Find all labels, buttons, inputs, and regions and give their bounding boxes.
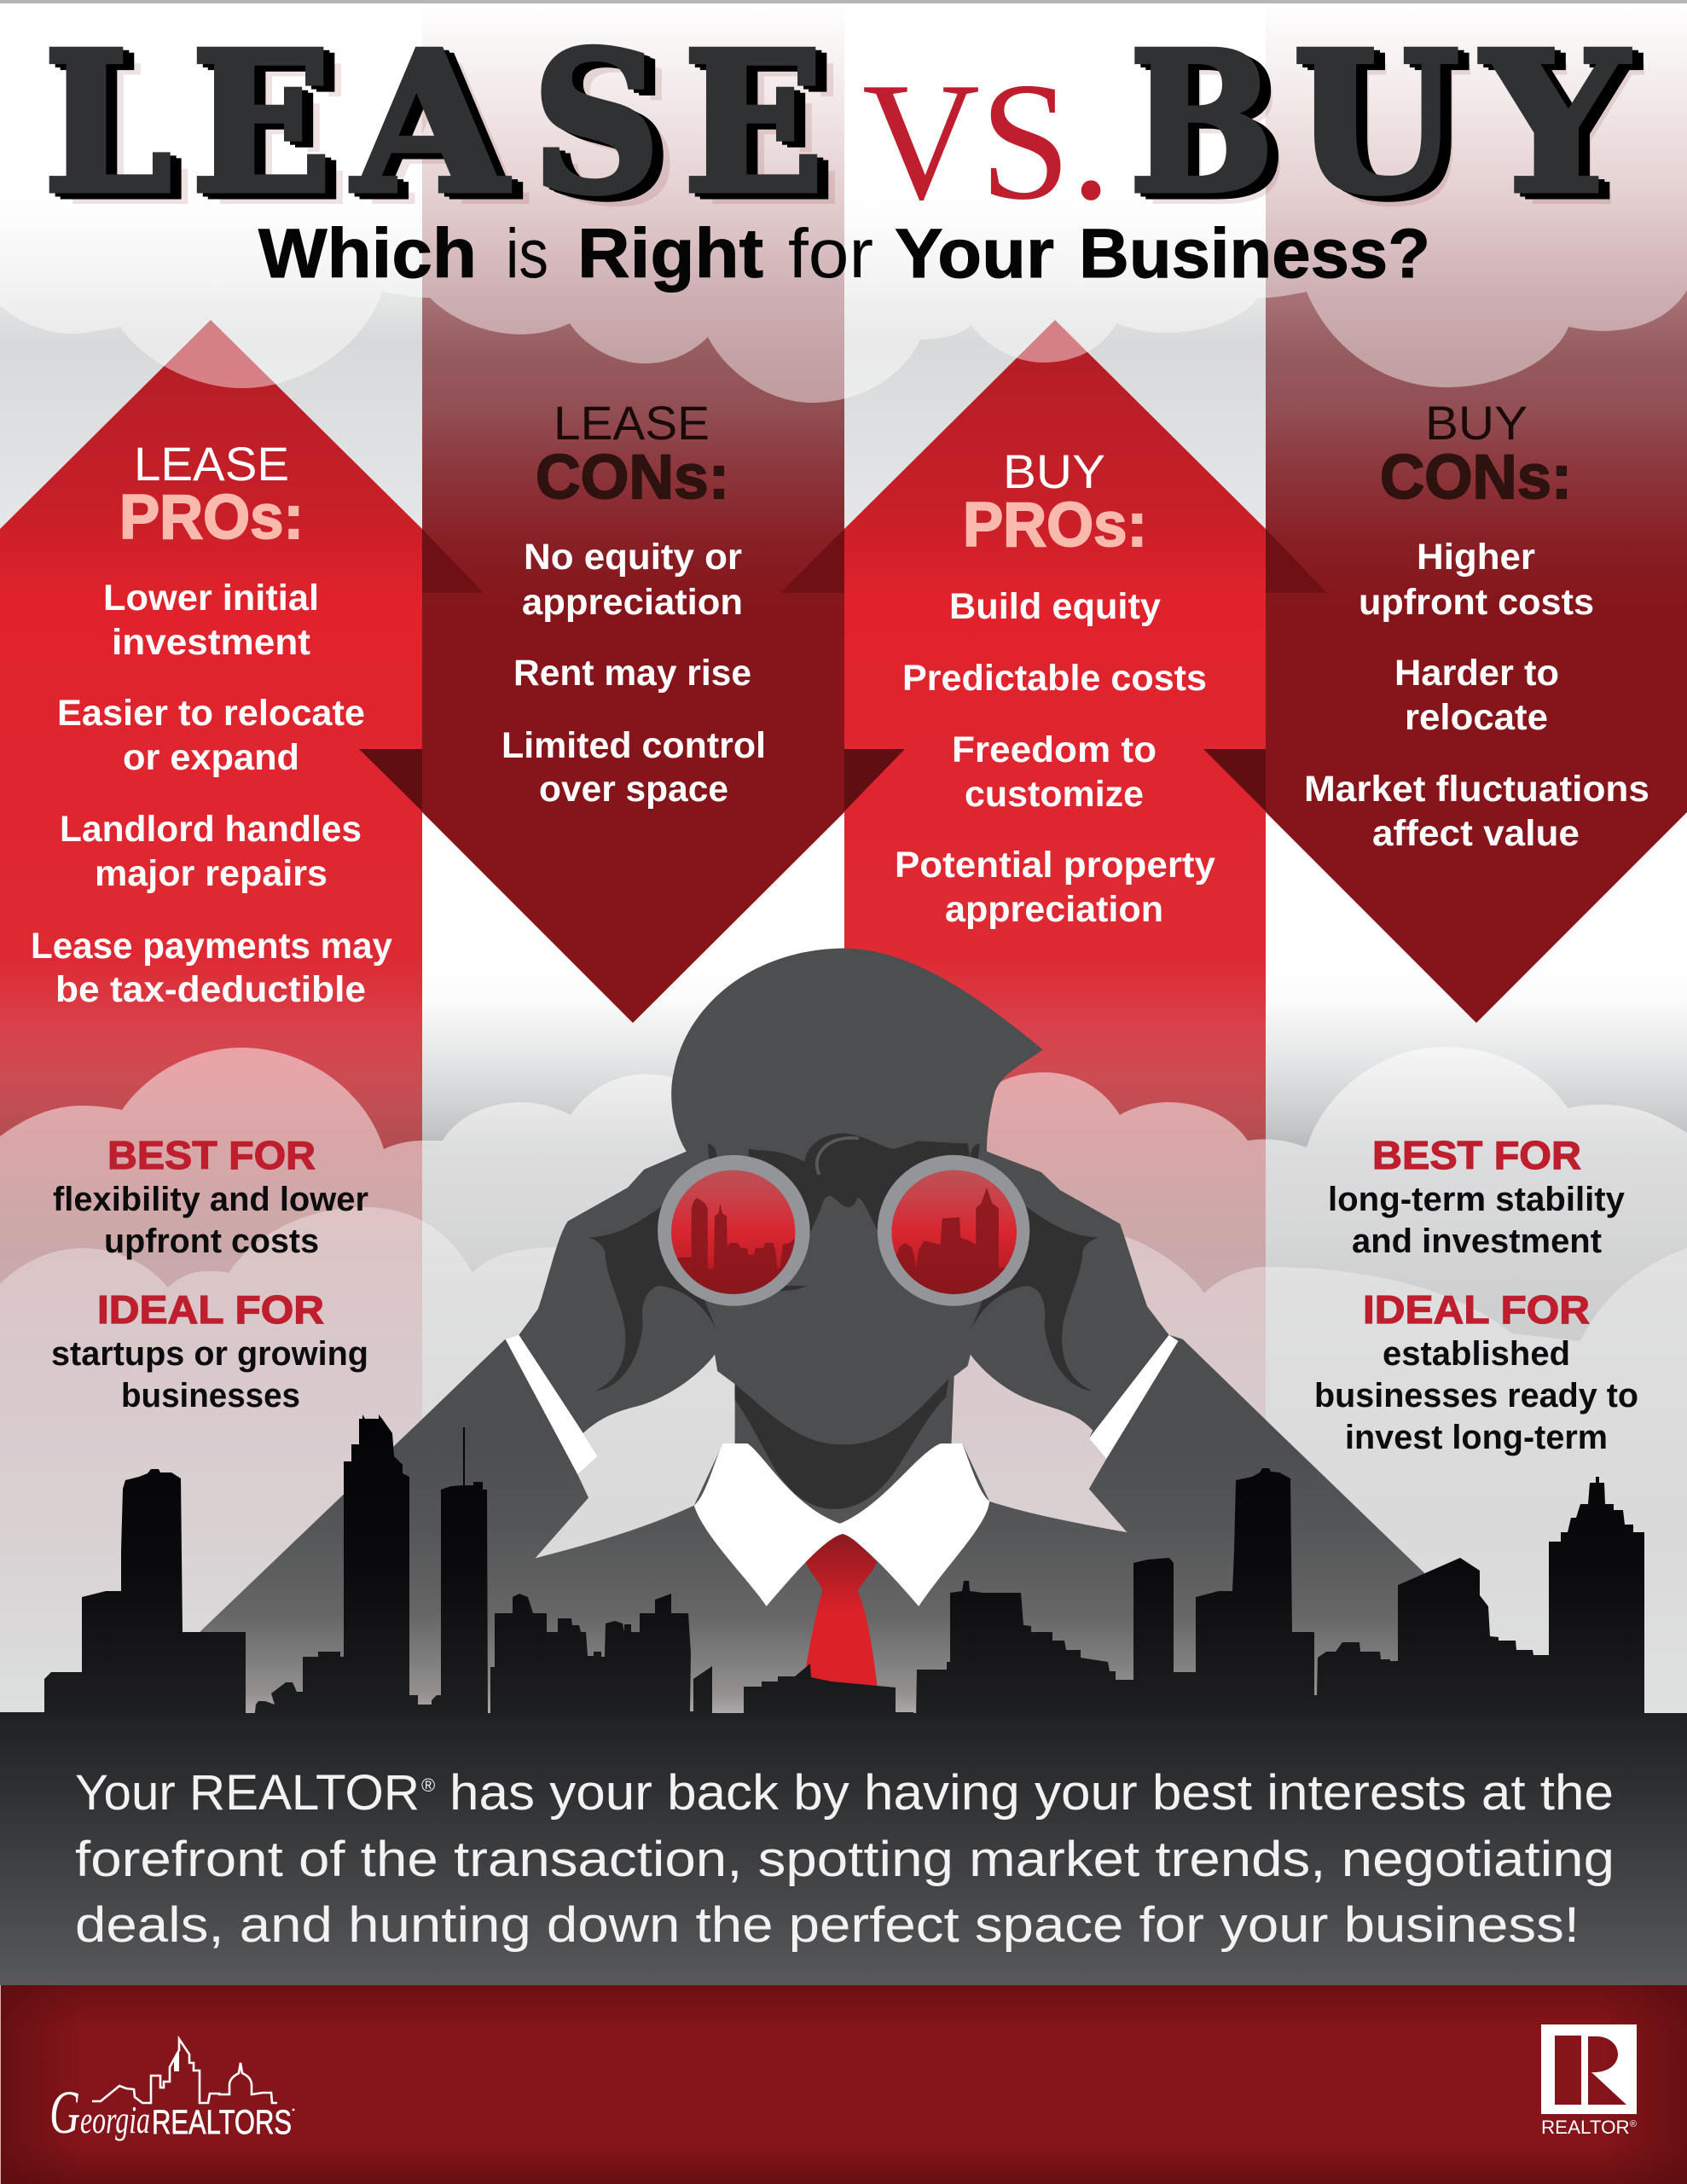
panel: lease pros column background bbox=[0, 0, 422, 1715]
heading: buy pros: PROs: bbox=[963, 491, 1147, 560]
title word: LEASE: E bbox=[191, 10, 332, 236]
title word: LEASE: E bbox=[694, 16, 835, 242]
illustration: businessman with binoculars bbox=[200, 949, 1466, 1722]
text block: buy best for / ideal for: businesses ready to bbox=[1314, 1377, 1638, 1414]
text block: buy pros list: customize bbox=[965, 774, 1144, 815]
title word: LEASE: E bbox=[704, 24, 844, 250]
text block: closing message: forefront of the transaction, spotting market trends, negotiating bbox=[75, 1832, 1615, 1887]
heading: buy pros: BUY bbox=[1003, 444, 1105, 498]
title word: LEASE: E bbox=[689, 14, 830, 240]
panel: lease cons column background bbox=[422, 0, 844, 1715]
text block: buy pros list: Potential property bbox=[895, 845, 1215, 886]
top clouds bbox=[0, 0, 1687, 403]
title word: LEASE: S bbox=[553, 24, 681, 250]
top edge strip bbox=[0, 0, 1687, 3]
red tie bbox=[806, 1534, 878, 1692]
title word: LEASE bbox=[43, 10, 844, 250]
suit, arms and head silhouette bbox=[200, 949, 1466, 1722]
text block: buy cons list bbox=[1304, 537, 1649, 854]
title word: BUY: Y bbox=[1496, 24, 1645, 250]
title word: LEASE: L bbox=[64, 24, 192, 250]
lower clouds, front layer bbox=[0, 1207, 1687, 1715]
logo: Georgia Realtors: Georgia bbox=[49, 2078, 150, 2146]
text block: buy cons list: Market fluctuations bbox=[1304, 769, 1649, 810]
title word: LEASE: E bbox=[683, 10, 824, 236]
text block: lease cons list: No equity or bbox=[524, 537, 742, 578]
text block: lease pros list: Lease payments may bbox=[31, 926, 392, 967]
face shadows and fingers bbox=[588, 1133, 1099, 1509]
title word: BUY: U bbox=[1299, 14, 1465, 240]
text block: buy best for / ideal for bbox=[1314, 1133, 1638, 1456]
text block: lease best for / ideal for: flexibility and lower bbox=[53, 1181, 368, 1218]
panel: closing message bbox=[0, 1713, 1687, 1985]
title word: LEASE: L bbox=[49, 14, 177, 240]
text block: buy pros list: Freedom to bbox=[952, 729, 1157, 770]
text block: lease pros list: Landlord handles bbox=[60, 809, 362, 850]
subtitle: Which bbox=[258, 215, 477, 293]
text block: closing message: ® bbox=[421, 1774, 435, 1796]
text block: lease pros list: investment bbox=[112, 622, 310, 663]
subtitle bbox=[258, 215, 1430, 293]
text block: buy best for / ideal for: long-term stability bbox=[1328, 1181, 1626, 1218]
text block: lease best for / ideal for bbox=[51, 1133, 368, 1414]
title word: LEASE: A bbox=[351, 10, 509, 236]
text block: lease cons list bbox=[501, 537, 766, 810]
logo: REALTOR block R bbox=[1541, 2024, 1637, 2138]
subtitle: Your bbox=[895, 215, 1054, 293]
logo: Georgia Realtors: REALTORS bbox=[152, 2104, 292, 2141]
right binocular lens bbox=[878, 1155, 1029, 1306]
text block: lease cons list: over space bbox=[539, 769, 728, 810]
title word: BUY: Y bbox=[1481, 10, 1630, 236]
title word: LEASE: S bbox=[532, 10, 660, 236]
subtitle: Business? bbox=[1079, 215, 1430, 293]
heading: lease pros: PROs: bbox=[119, 483, 304, 552]
logo: Georgia Realtors bbox=[49, 2039, 294, 2146]
white shirt collar bbox=[694, 1443, 989, 1606]
title word: LEASE: E bbox=[212, 24, 352, 250]
text block: lease pros list bbox=[31, 578, 392, 1010]
text block: buy cons list: Higher bbox=[1417, 537, 1535, 578]
text block: buy best for / ideal for: IDEAL FOR bbox=[1363, 1287, 1590, 1332]
text block: lease pros list: be tax-deductible bbox=[55, 969, 366, 1010]
text block: lease pros list: Easier to relocate bbox=[57, 693, 365, 734]
text block: lease best for / ideal for: upfront costs bbox=[104, 1223, 319, 1260]
text block: lease pros list: Lower initial bbox=[103, 578, 319, 619]
text block: buy best for / ideal for: BEST FOR bbox=[1372, 1133, 1581, 1177]
title word: BUY: U bbox=[1304, 16, 1470, 242]
title word: LEASE: L bbox=[55, 16, 183, 242]
title word: BUY: Y bbox=[1492, 16, 1641, 242]
title word: LEASE: S bbox=[543, 16, 671, 242]
title word: LEASE: E bbox=[202, 16, 343, 242]
text block: closing message: Your REALTOR bbox=[75, 1765, 420, 1821]
heading: lease pros: LEASE bbox=[134, 437, 289, 491]
heading: buy cons: BUY bbox=[1425, 396, 1528, 450]
left binocular lens bbox=[658, 1155, 810, 1306]
text block: buy pros list: Predictable costs bbox=[902, 658, 1207, 699]
text block: lease best for / ideal for: startups or growing bbox=[51, 1335, 368, 1373]
text block: lease best for / ideal for: BEST FOR bbox=[107, 1133, 316, 1177]
text block: buy cons list: upfront costs bbox=[1359, 582, 1594, 623]
subtitle: for bbox=[788, 215, 873, 293]
text block: lease cons list: appreciation bbox=[522, 582, 743, 623]
title word: BUY: Y bbox=[1487, 14, 1636, 240]
arrow fold shadows bbox=[359, 529, 1327, 811]
text block: closing message: has your back by having your best interests at the bbox=[449, 1765, 1614, 1821]
text block: buy pros list: Build equity bbox=[949, 586, 1161, 627]
text block: closing message bbox=[75, 1765, 1615, 1953]
title word: BUY: B bbox=[1129, 10, 1274, 236]
title word: LEASE: A bbox=[372, 24, 530, 250]
text block: lease cons list: Limited control bbox=[501, 725, 766, 766]
title word: LEASE: A bbox=[362, 16, 520, 242]
title word: LEASE: A bbox=[357, 14, 515, 240]
logo: REALTOR block R: ® bbox=[1630, 2119, 1637, 2129]
text block: closing message: deals, and hunting down the perfect space for your business! bbox=[75, 1897, 1580, 1953]
lower clouds, back layer bbox=[0, 1047, 1687, 1715]
title word: LEASE: E bbox=[197, 14, 338, 240]
text block: buy best for / ideal for: and investment bbox=[1352, 1223, 1602, 1260]
text block: buy best for / ideal for: invest long-term bbox=[1345, 1419, 1608, 1456]
text block: lease pros list: major repairs bbox=[95, 853, 328, 894]
title word: BUY bbox=[1129, 10, 1645, 250]
panel: footer band bbox=[0, 1985, 1687, 2184]
logo: REALTOR block R: REALTOR bbox=[1541, 2117, 1628, 2138]
text block: lease best for / ideal for: businesses bbox=[121, 1377, 300, 1414]
text block: buy pros list bbox=[895, 586, 1215, 930]
title word: BUY: U bbox=[1293, 10, 1459, 236]
heading: lease pros bbox=[119, 437, 304, 552]
heading: lease cons: LEASE bbox=[554, 396, 710, 450]
subtitle: is bbox=[506, 215, 548, 293]
city skyline bbox=[0, 1414, 1687, 1732]
panel: buy pros column background bbox=[844, 0, 1266, 1715]
heading: lease cons: CONs: bbox=[536, 443, 729, 512]
text block: buy cons list: relocate bbox=[1405, 697, 1548, 738]
text block: buy pros list: appreciation bbox=[945, 889, 1163, 930]
panel: buy cons column background bbox=[1266, 0, 1687, 1715]
text block: lease pros list: or expand bbox=[123, 737, 299, 778]
title word: BUY: B bbox=[1145, 24, 1290, 250]
text block: buy cons list: Harder to bbox=[1394, 653, 1559, 694]
title word: VS.: VS. bbox=[862, 48, 1111, 235]
text block: buy cons list: affect value bbox=[1372, 813, 1580, 854]
text block: lease best for / ideal for: IDEAL FOR bbox=[97, 1287, 324, 1332]
left shirt cuff bbox=[505, 1335, 598, 1474]
title word: LEASE: L bbox=[43, 10, 171, 236]
title word: LEASE: S bbox=[538, 14, 666, 240]
heading: buy cons bbox=[1380, 396, 1572, 512]
text block: lease cons list: Rent may rise bbox=[513, 653, 751, 694]
title word: BUY: B bbox=[1135, 14, 1280, 240]
title word: BUY: U bbox=[1308, 24, 1475, 250]
right shirt cuff bbox=[1089, 1335, 1178, 1459]
title word: BUY: B bbox=[1140, 16, 1285, 242]
heading: buy cons: CONs: bbox=[1380, 443, 1572, 512]
subtitle: Right bbox=[577, 215, 763, 293]
text block: buy best for / ideal for: established bbox=[1383, 1335, 1570, 1373]
heading: buy pros bbox=[963, 444, 1147, 560]
title: LEASE VS. BUY bbox=[43, 10, 1645, 250]
heading: lease cons bbox=[536, 396, 729, 512]
